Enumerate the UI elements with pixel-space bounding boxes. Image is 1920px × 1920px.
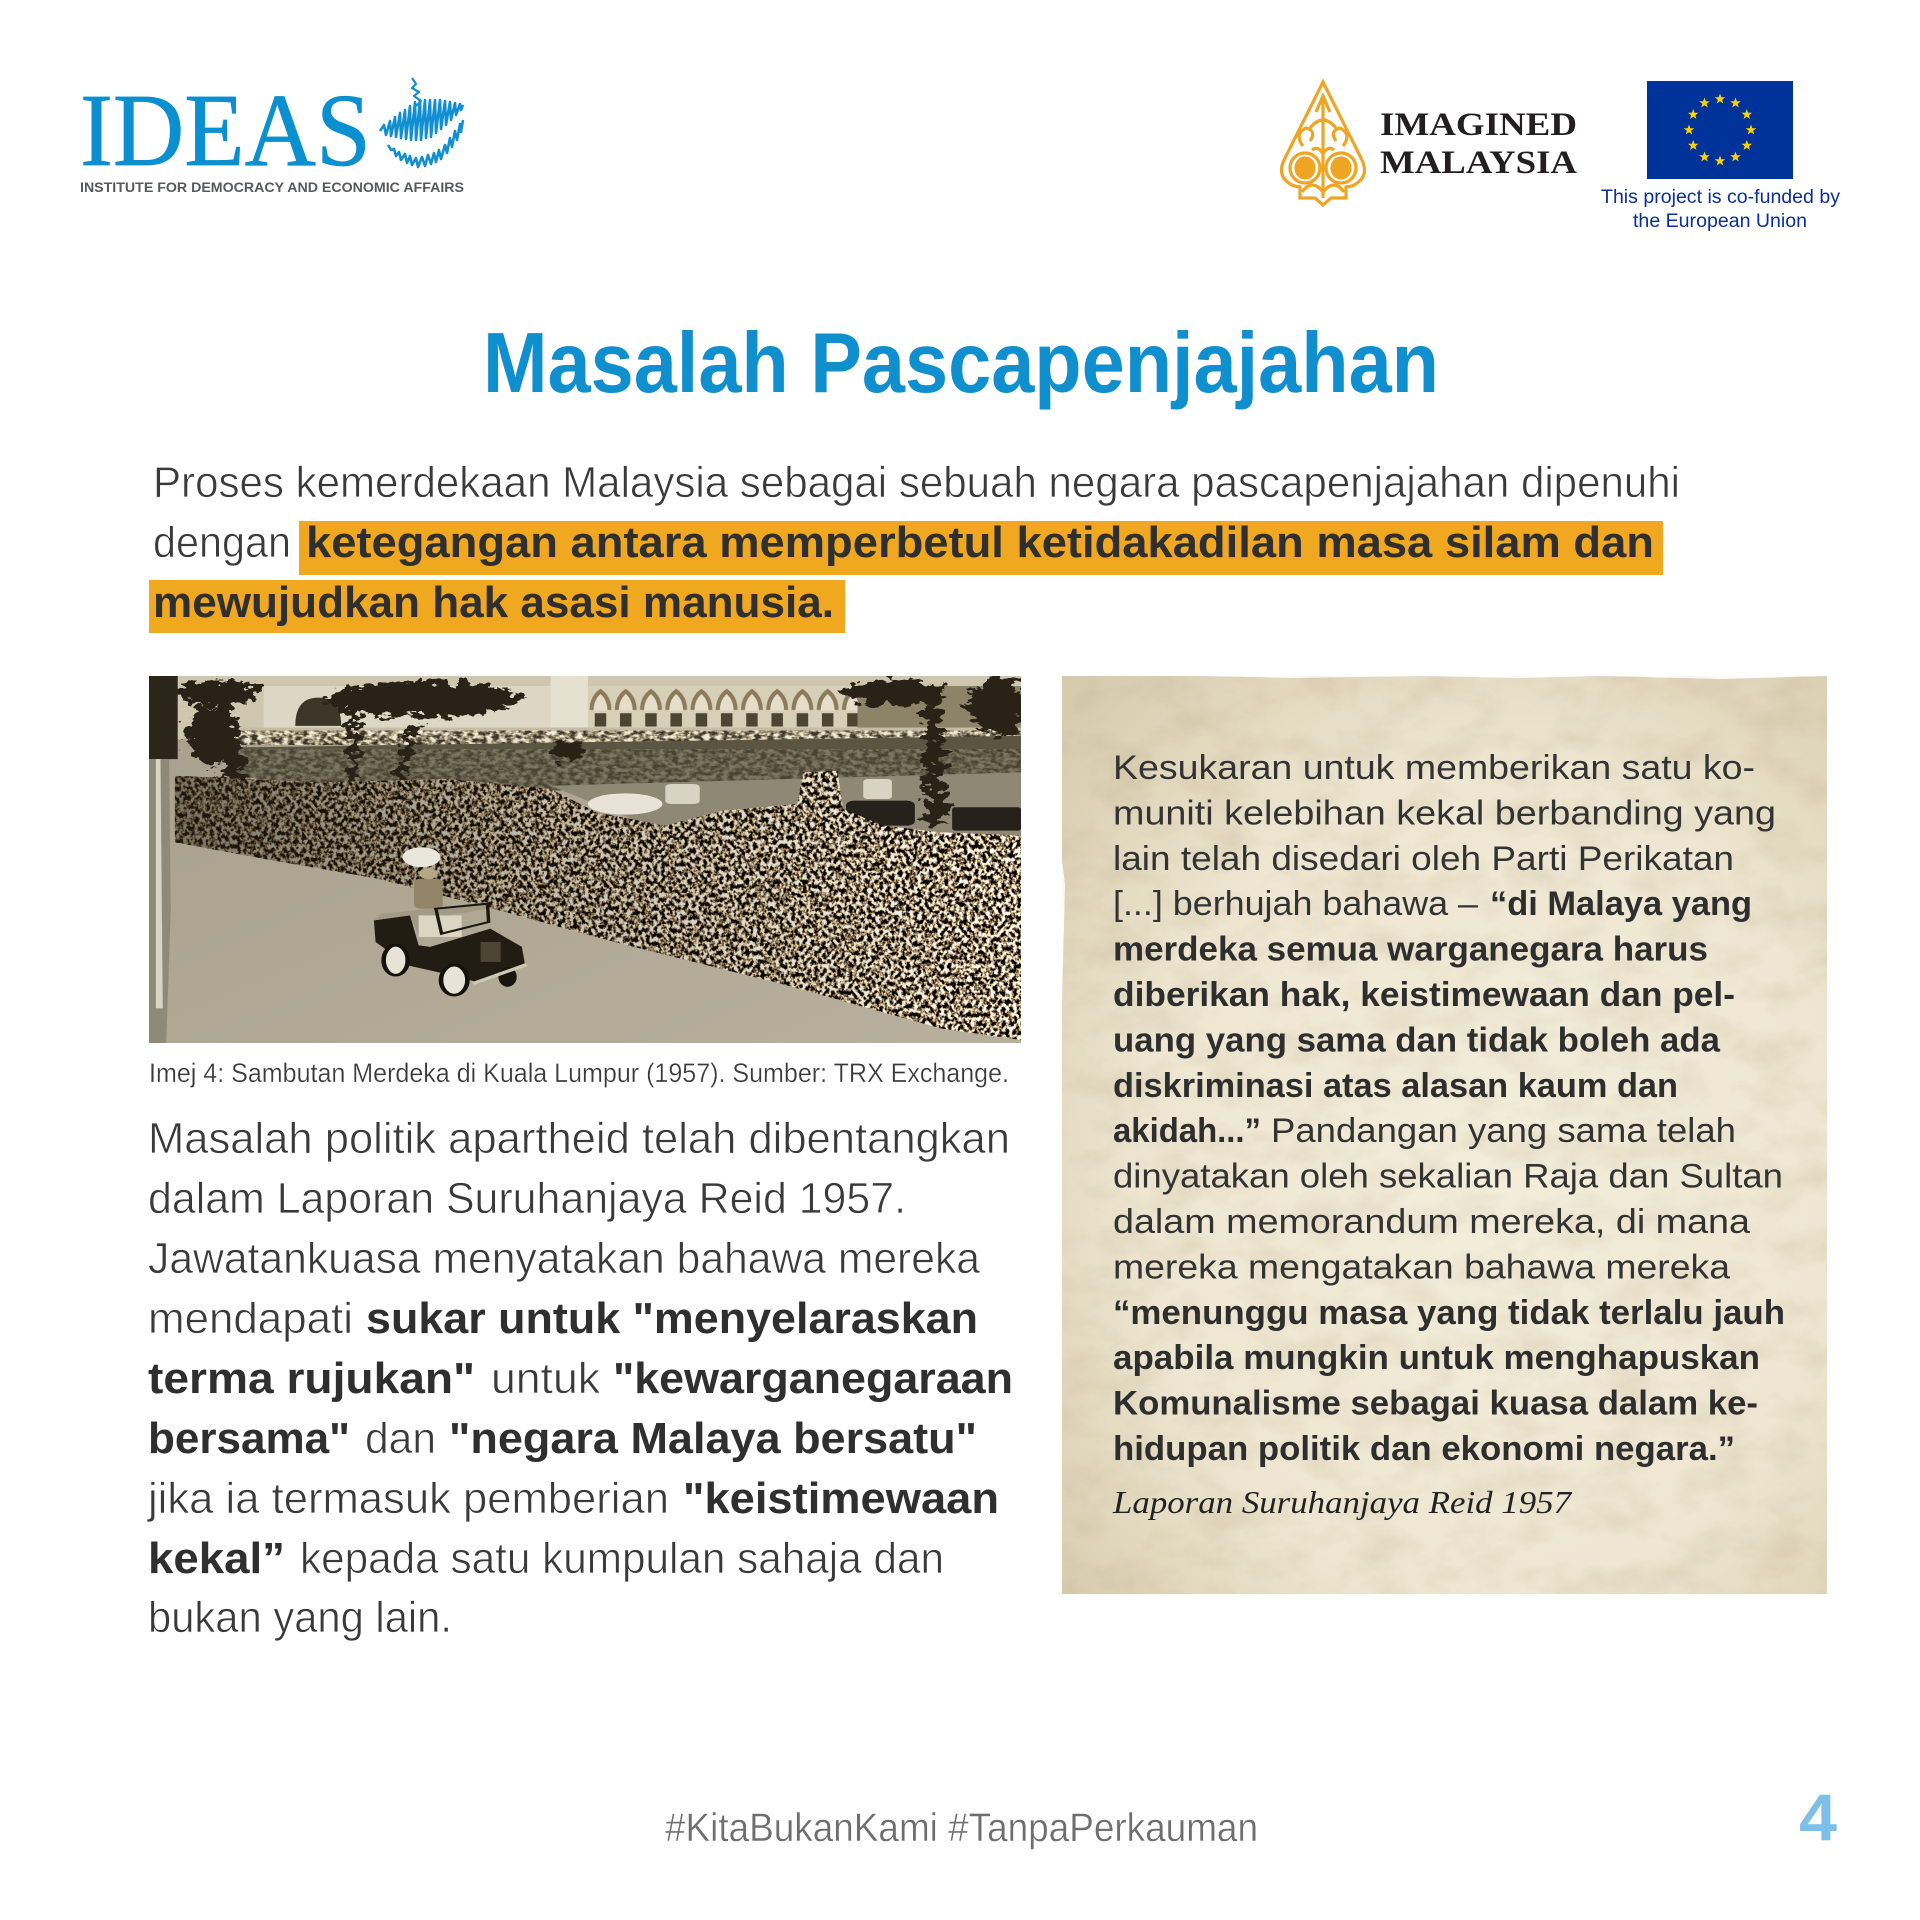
footer hashtags: #KitaBukanKami #TanpaPerkauman (665, 1806, 1258, 1850)
intro line 2 bold: ketegangan antara memperbetul ketidakadilan masa silam dan (306, 518, 1654, 567)
page number: 4 (1799, 1780, 1837, 1854)
body text block (146, 1114, 1013, 1642)
intro line 3 bold: mewujudkan hak asasi manusia. (153, 578, 834, 627)
logo text line 2: MALAYSIA (1380, 145, 1577, 181)
quote text: “menunggu masa yang tidak terlalu jauh (1113, 1294, 1785, 1332)
logo: Imagined Malaysia (1282, 82, 1577, 205)
quote text: hidupan politik dan ekonomi negara.” (1113, 1430, 1735, 1468)
logo text: IMAGINED (1380, 107, 1577, 143)
body line 3: Jawatankuasa menyatakan bahawa mereka (148, 1234, 981, 1283)
logo wordmark: IDEAS (80, 73, 371, 188)
highlight line 2 (299, 521, 1663, 575)
quote text: dinyatakan oleh sekalian Raja dan Sultan (1113, 1158, 1783, 1196)
body line 6: bersama" (148, 1414, 350, 1463)
trees (178, 676, 1027, 826)
quote text: mereka mengatakan bahawa mereka (1113, 1248, 1730, 1286)
jeep (374, 902, 526, 995)
body line 5: "kewarganegaraan (613, 1354, 1013, 1403)
photo: Merdeka parade crowd (149, 676, 1021, 1043)
quote source: Laporan Suruhanjaya Reid 1957 (1112, 1484, 1573, 1520)
quote text: Komunalisme sebagai kuasa dalam ke- (1113, 1385, 1758, 1423)
quote text (1113, 749, 1785, 1468)
intro line 2 regular: dengan (153, 518, 291, 567)
body line 4: sukar untuk "menyelaraskan (366, 1294, 978, 1343)
flag and pole at left edge (149, 676, 178, 759)
body line 1: Masalah politik apartheid telah dibentangkan (148, 1114, 1010, 1163)
body line 6: "negara Malaya bersatu" (449, 1414, 977, 1463)
body line 5 (148, 1354, 1013, 1403)
body line 6: dan (365, 1414, 436, 1463)
logo: IDEAS (80, 73, 464, 195)
quote text: merdeka semua warganegara harus (1113, 931, 1708, 969)
quote text: dalam memorandum mereka, di mana (1113, 1203, 1750, 1241)
building arcade (588, 686, 858, 728)
quote text: diberikan hak, keistimewaan dan pel- (1113, 976, 1735, 1014)
caption: Imej 4: Sambutan Merdeka di Kuala Lumpur (1957). Sumber: TRX Exchange. (149, 1058, 1009, 1088)
intro line 1: Proses kemerdekaan Malaysia sebagai sebuah negara pascapenjajahan dipenuhi (153, 458, 1680, 507)
funding note line 2: the European Union (1633, 211, 1807, 232)
title: Masalah Pascapenjajahan (483, 316, 1439, 411)
body line 2: dalam Laporan Suruhanjaya Reid 1957. (148, 1174, 906, 1223)
panel: aged paper quote (1062, 676, 1827, 1594)
body line 7 (146, 1474, 999, 1523)
quote text: “di Malaya yang (1490, 885, 1752, 923)
quote text: muniti kelebihan kekal berbanding yang (1113, 794, 1776, 832)
crowd (174, 770, 1021, 1040)
quote text: akidah...” (1113, 1112, 1261, 1150)
quote text: [...] berhujah bahawa – (1113, 885, 1478, 923)
body line 7: jika ia termasuk pemberian (146, 1474, 669, 1523)
quote text: uang yang sama dan tidak boleh ada (1113, 1021, 1721, 1059)
quote text: Kesukaran untuk memberikan satu ko- (1113, 749, 1755, 787)
body line 9: bukan yang lain. (148, 1593, 452, 1642)
quote text: Pandangan yang sama telah (1271, 1112, 1736, 1150)
umbrella and attendant (403, 847, 440, 867)
quote text: lain telah disedari oleh Parti Perikatan (1113, 840, 1734, 878)
body line 5: untuk (491, 1354, 601, 1403)
paper background (1062, 676, 1827, 1594)
parked cars (588, 779, 1021, 831)
quote text: diskriminasi atas alasan kaum dan (1113, 1067, 1678, 1105)
body line 4: mendapati (148, 1294, 353, 1343)
logo tagline: INSTITUTE FOR DEMOCRACY AND ECONOMIC AFFAIRS (80, 180, 464, 195)
intro text with highlight (149, 458, 1680, 633)
icon: wayang ornament (1282, 82, 1364, 205)
body line 8: kepada satu kumpulan sahaja dan (300, 1534, 944, 1583)
body line 6 (148, 1414, 977, 1463)
icon: EU flag (1647, 81, 1793, 179)
highlight line 3 (149, 580, 845, 633)
wall and lawn (235, 736, 1021, 791)
quote text: apabila mungkin untuk menghapuskan (1113, 1339, 1760, 1377)
body line 7: "keistimewaan (683, 1474, 999, 1523)
body line 5: terma rujukan" (148, 1354, 475, 1403)
funding note: This project is co-funded by (1601, 187, 1841, 208)
logo: EU flag and funding note (1601, 81, 1841, 232)
body line 8: kekal” (148, 1534, 285, 1583)
icon: dove (380, 78, 463, 167)
